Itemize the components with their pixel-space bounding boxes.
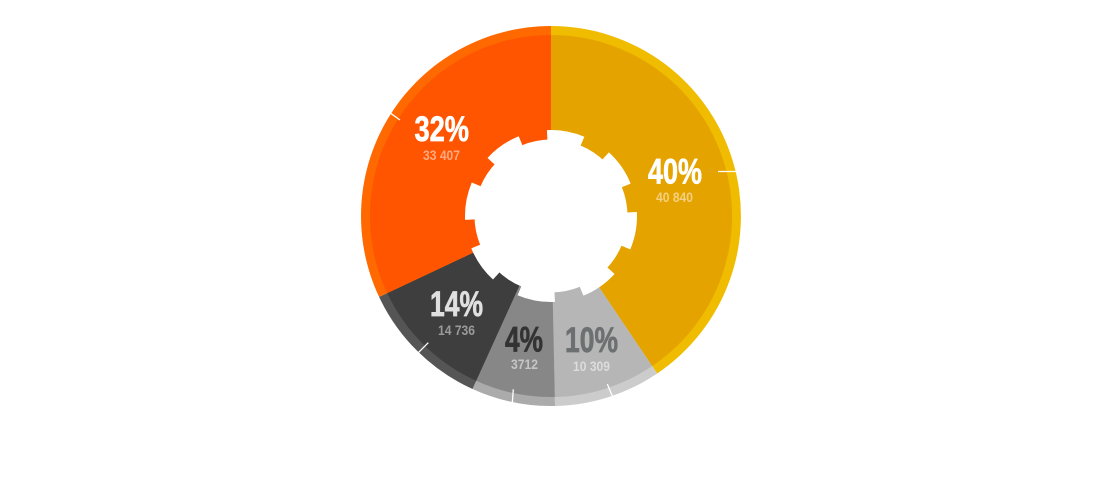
center hole with notched edge bbox=[466, 131, 636, 301]
segment: 10% light gray bbox=[551, 216, 657, 406]
label: 40% bbox=[648, 152, 702, 205]
label: 14%: 14% bbox=[430, 285, 483, 324]
label: 40%: 40% bbox=[648, 152, 702, 192]
label: 32%: 33 407 bbox=[423, 147, 460, 163]
label: 14% bbox=[430, 285, 483, 338]
label: 14%: 14 736 bbox=[438, 322, 475, 338]
label: 10%: 10 309 bbox=[573, 358, 610, 374]
label: 40%: 40 840 bbox=[656, 189, 693, 205]
segment: 14% dark gray bbox=[379, 216, 551, 389]
label: 32%: 32% bbox=[414, 110, 469, 149]
tick marks bbox=[391, 113, 736, 403]
label: 4%: 3712 bbox=[511, 356, 538, 372]
label: 32% bbox=[414, 110, 469, 163]
segment: 40% yellow bbox=[551, 26, 741, 374]
label: 10%: 10% bbox=[565, 321, 618, 360]
segment: 4% mid gray bbox=[472, 216, 555, 406]
label: 10% bbox=[565, 321, 618, 374]
label: 4% bbox=[505, 320, 543, 372]
label: 4%: 4% bbox=[505, 320, 543, 360]
segment: 32% orange bbox=[361, 26, 551, 297]
